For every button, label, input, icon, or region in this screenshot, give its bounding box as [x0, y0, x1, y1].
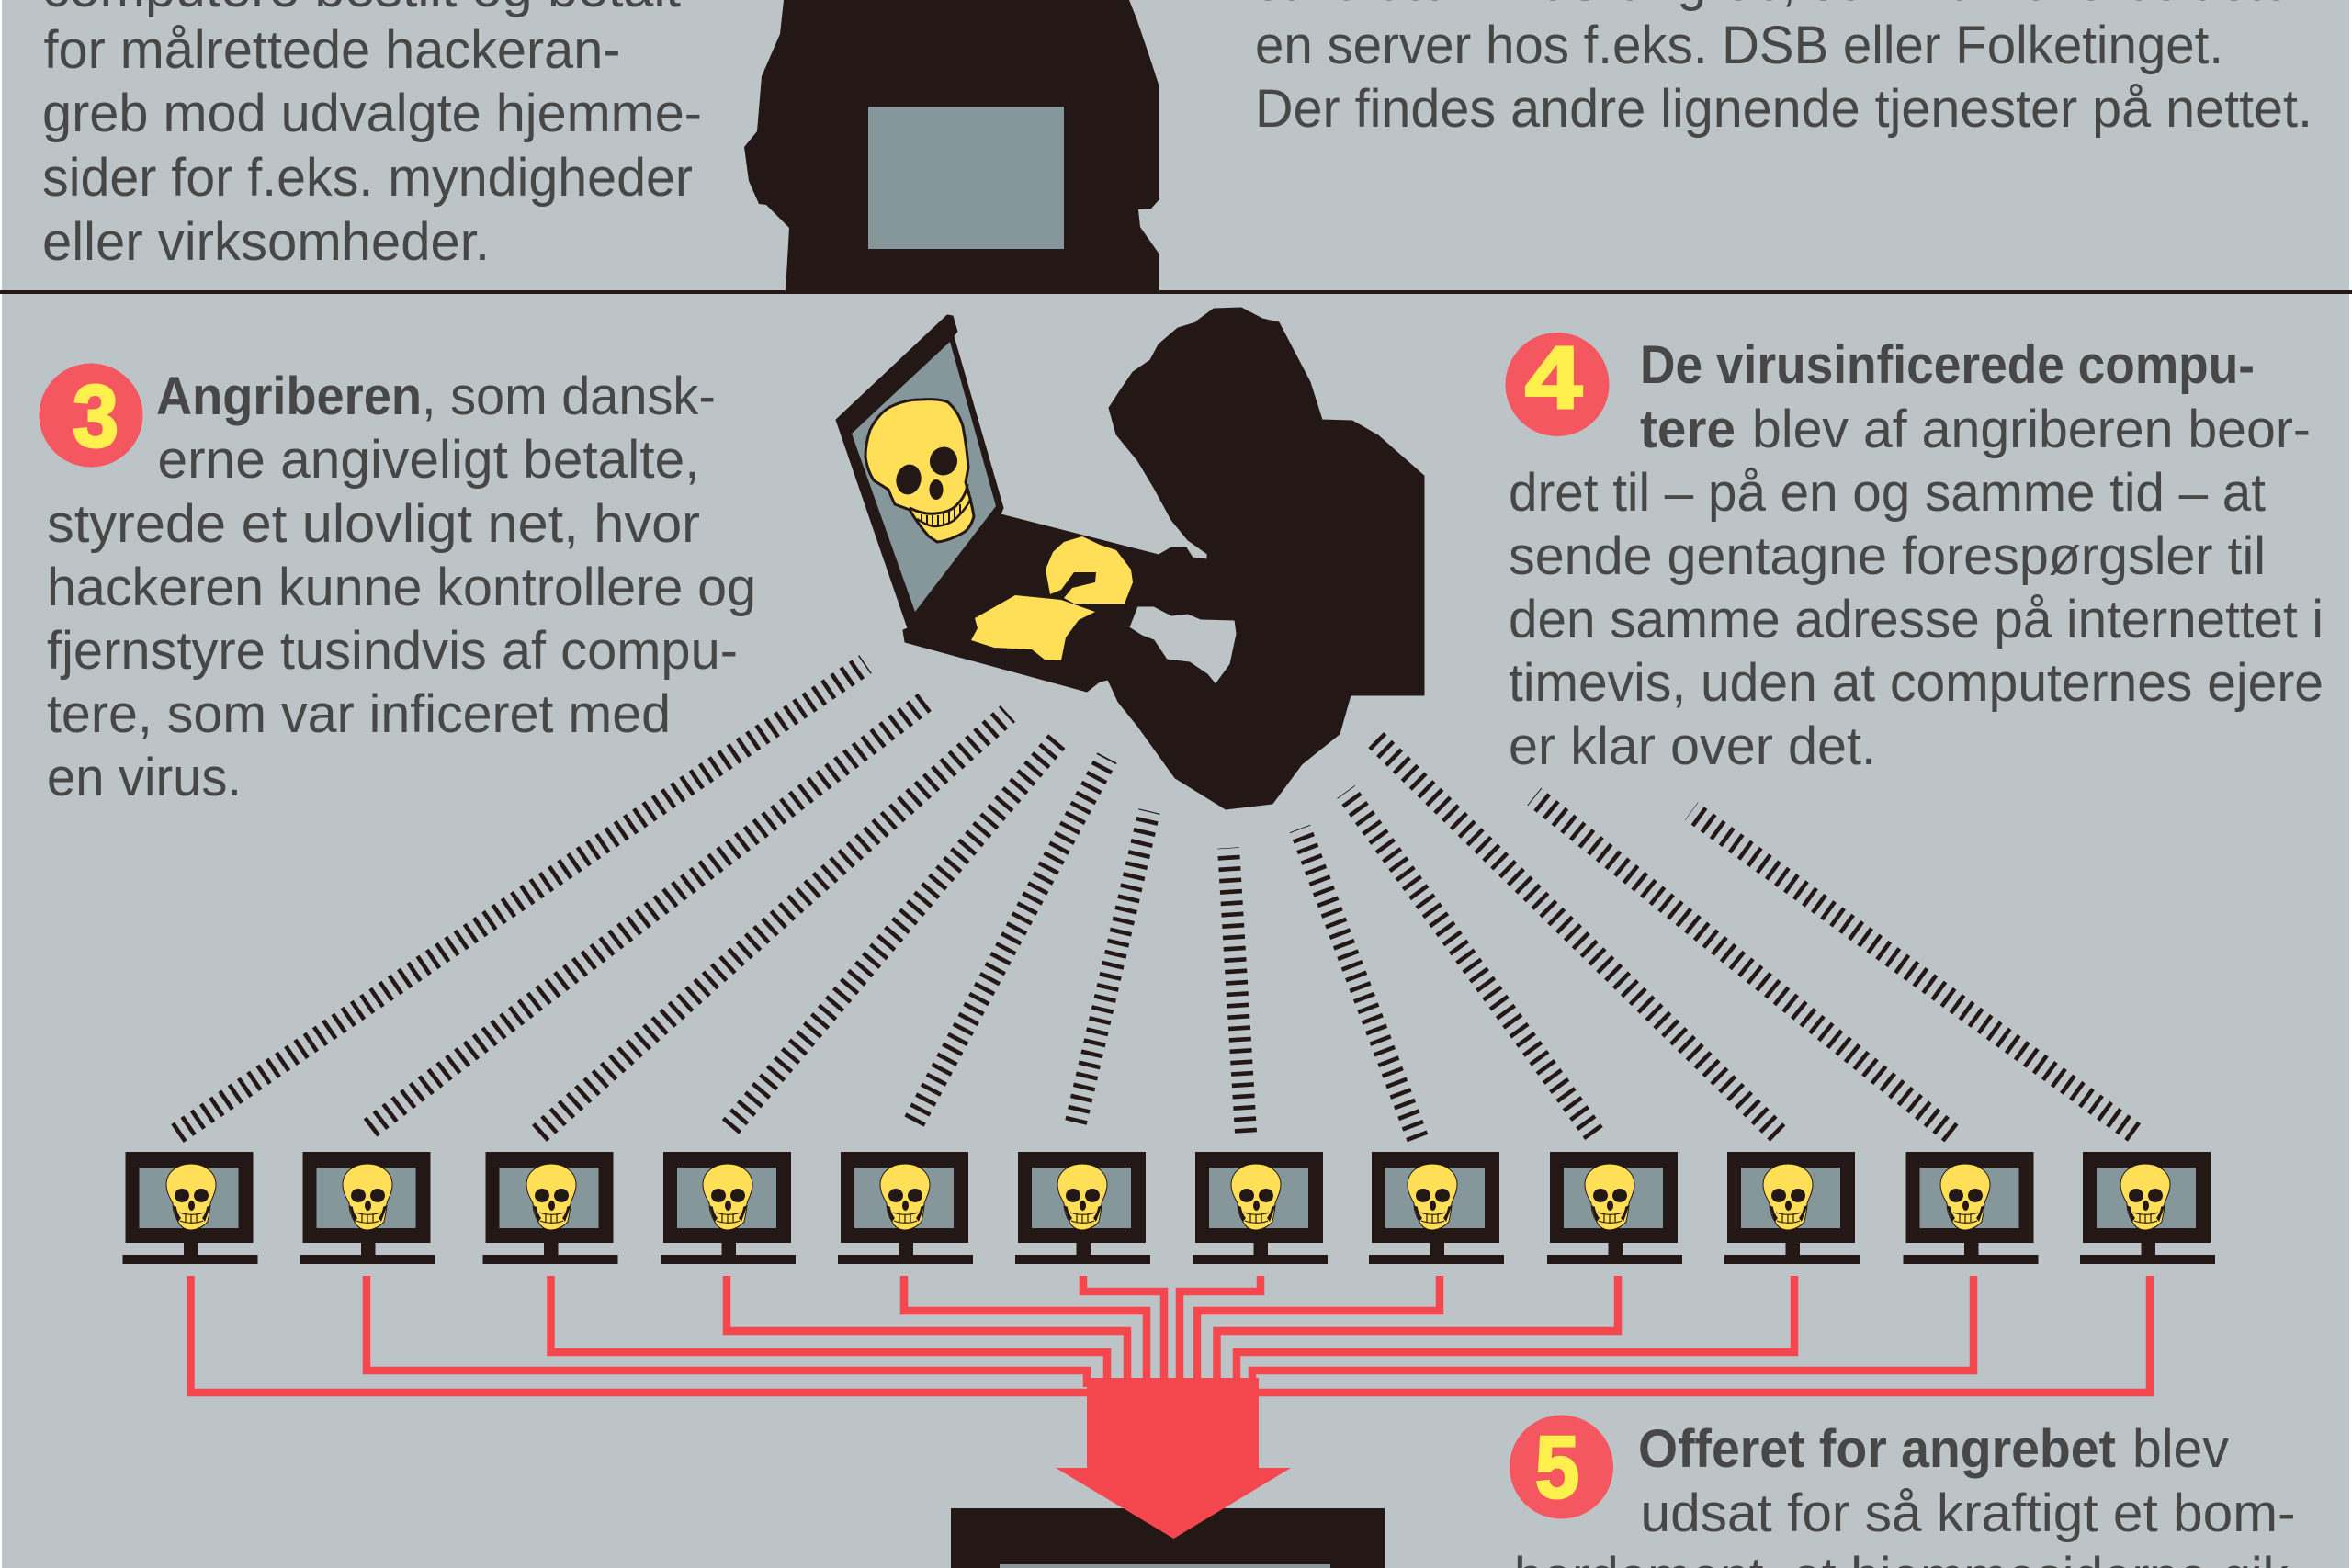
step 3 body text: , som dansk-: [422, 367, 716, 426]
text block: step 2 tail: en server hos f.eks. DSB eller Folketinget.: [1255, 16, 2223, 75]
step badge 4: [1505, 329, 1610, 436]
computer 10: [1724, 1152, 1860, 1264]
connector 3: [539, 714, 1008, 1134]
computer 5: [838, 1152, 973, 1264]
step 4 body text: timevis, uden at computernes ejere: [1509, 653, 2324, 713]
step badge 3: 3: [73, 367, 119, 466]
divider line: [0, 290, 2352, 294]
step badge 3: [39, 364, 143, 467]
computer 4: [661, 1152, 796, 1264]
connector 10: [1373, 737, 1778, 1134]
computer 1: [123, 1152, 257, 1264]
step badge 5: [1510, 1415, 1613, 1519]
big red arrow: [1056, 1378, 1291, 1539]
step badge 4: 4: [1525, 329, 1582, 427]
row of infected computers: [123, 1152, 2215, 1264]
computer 8: [1369, 1152, 1504, 1264]
step 4 body text: sende gentagne forespørgsler til: [1509, 526, 2266, 586]
computer 2: [300, 1152, 435, 1264]
connector 1: [177, 664, 865, 1134]
step 5 body text: udsat for så kraftigt et bom-: [1641, 1483, 2295, 1543]
top hacker silhouette with screen: [744, 0, 1159, 291]
step badge 5: 5: [1535, 1418, 1579, 1517]
step 4 body text: dret til – på en og samme tid – at: [1509, 463, 2266, 523]
step 5 body text: [1514, 1419, 2295, 1568]
connector 2: [370, 702, 925, 1128]
laptop screen: [852, 342, 996, 612]
step 4 body text: De virusinficerede compu-: [1640, 335, 2255, 395]
text block: step 1 tail: [42, 0, 702, 272]
computer 6: [1015, 1152, 1150, 1264]
text block: step 1 tail: sider for f.eks. myndigheder: [42, 148, 693, 208]
step 4 body text: tere: [1640, 400, 1736, 459]
hacker and laptop silhouette: [836, 308, 1424, 809]
connector 6: [1076, 811, 1149, 1122]
text block: step 2 tail: [1255, 0, 2312, 139]
step 3 body text: Angriberen: [156, 367, 422, 426]
computer 9: [1547, 1152, 1682, 1264]
computer 11: [1904, 1152, 2038, 1264]
step 4 body text: den samme adresse på internettet i: [1509, 590, 2324, 649]
connector 5: [914, 758, 1107, 1122]
step 3 body text: fjernstyre tusindvis af compu-: [47, 621, 738, 681]
text block: step 4: [1505, 329, 2324, 776]
step 3 body text: [47, 367, 756, 807]
connector 9: [1346, 792, 1594, 1134]
step 4 body text: [1509, 335, 2324, 776]
step 3 body text: erne angiveligt betalte,: [158, 430, 700, 490]
computer 7: [1193, 1152, 1328, 1264]
step 5 body text: Offeret for angrebet: [1638, 1419, 2116, 1479]
step 3 body text: en virus.: [47, 748, 242, 807]
text block: step 1 tail: eller virksomheder.: [42, 212, 490, 272]
victim server monitor: [951, 1508, 1385, 1568]
text block: step 1 tail: for målrettede hackeran-: [44, 20, 621, 80]
connector 8: [1300, 829, 1418, 1138]
step 3 body text: styrede et ulovligt net, hvor: [47, 494, 700, 554]
computer 12: [2080, 1152, 2215, 1264]
text block: step 3: [39, 364, 756, 807]
connector 7: [1228, 848, 1246, 1133]
connector 4: [730, 739, 1058, 1127]
computer 3: [483, 1152, 617, 1264]
text block: step 5: [1510, 1415, 2295, 1568]
red network lines converging on arrow: [191, 1276, 2150, 1393]
step 4 body text: blev af angriberen beor-: [1752, 400, 2311, 459]
connector 12: [1691, 811, 2134, 1133]
icon: lower yellow hand: [971, 595, 1095, 660]
icon: large skull on laptop screen: [865, 400, 974, 542]
hatched connectors from hacker to infected computers: [177, 664, 2134, 1138]
text block: step 2 tail: Der findes andre lignende tjenester på nettet.: [1255, 79, 2312, 139]
step 5 body text: blev: [2132, 1419, 2229, 1479]
icon: upper yellow hand: [1046, 536, 1133, 604]
step 3 body text: hackeren kunne kontrollere og: [47, 558, 756, 617]
connector 11: [1534, 796, 1951, 1134]
text block: step 1 tail: greb mod udvalgte hjemme-: [42, 84, 702, 143]
step 3 body text: tere, som var inficeret med: [47, 684, 671, 744]
hacker at laptop illustration: [836, 308, 1424, 809]
step 4 body text: er klar over det.: [1509, 716, 1876, 776]
